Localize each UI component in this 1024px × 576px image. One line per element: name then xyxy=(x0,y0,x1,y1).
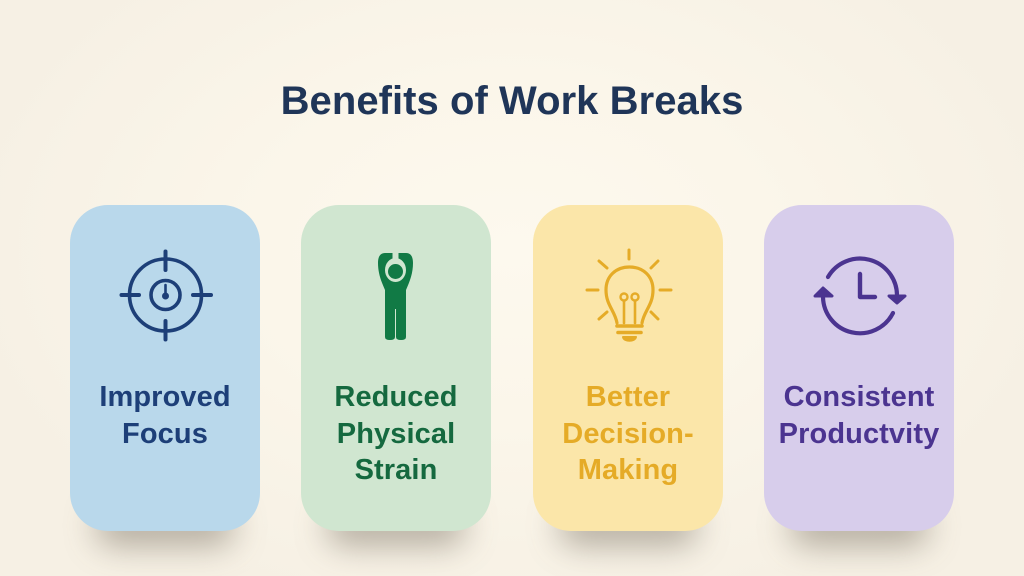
label: reduced physical strain: Strain xyxy=(355,454,437,486)
panel: consistent productivity xyxy=(764,205,954,531)
label: improved focus xyxy=(99,381,231,450)
label: consistent productivity: Consistent xyxy=(784,381,934,413)
label: consistent productivity xyxy=(779,381,939,450)
title: Benefits of Work Breaks xyxy=(281,79,743,123)
label: better decision-making xyxy=(562,381,694,486)
icon: light bulb xyxy=(586,248,672,342)
icon: target with dial xyxy=(120,250,213,342)
icon: person stretching xyxy=(378,253,413,340)
label: improved focus: Improved xyxy=(99,381,231,413)
panel: better decision-making xyxy=(533,205,723,531)
icon: clock with cycle arrows xyxy=(814,256,907,336)
label: consistent productivity: Productvity xyxy=(779,418,939,450)
label: better decision-making: Making xyxy=(578,454,678,486)
panel: improved focus xyxy=(70,205,260,531)
panel: reduced physical strain xyxy=(301,205,491,531)
label: reduced physical strain xyxy=(334,381,458,486)
label: reduced physical strain: Reduced xyxy=(334,381,458,413)
label: reduced physical strain: Physical xyxy=(337,418,455,450)
label: improved focus: Focus xyxy=(122,418,208,450)
label: better decision-making: Decision- xyxy=(562,418,694,450)
label: better decision-making: Better xyxy=(586,381,670,413)
